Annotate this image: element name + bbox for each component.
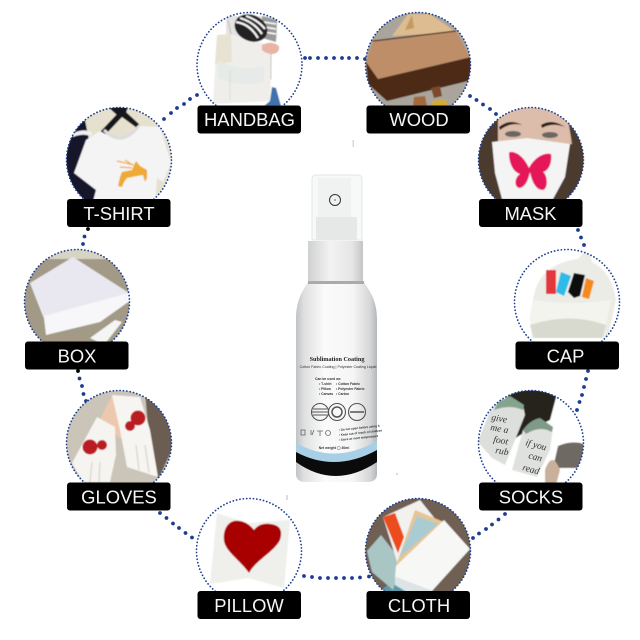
sock lettering: give [490, 413, 508, 426]
sock lettering [490, 415, 546, 474]
connector dots between circles [76, 56, 590, 580]
label: cloth: CLOTH [388, 595, 450, 616]
label: box: BOX [58, 346, 96, 366]
care notes [339, 424, 382, 442]
panel: pillow [195, 498, 303, 619]
usage list [315, 377, 365, 396]
photo: folded cloth [366, 498, 470, 591]
label: wood: WOOD [389, 109, 449, 130]
panel: gloves [66, 390, 172, 510]
specks [286, 140, 398, 500]
panel: cloth [364, 498, 472, 619]
panel: mask [478, 107, 584, 227]
label: mask: MASK [504, 203, 557, 224]
care notes: • Do not open before using it [339, 424, 380, 432]
net weight: Net weight ◯ 30ml [319, 446, 349, 450]
photo: t-shirt [66, 108, 172, 199]
label: gloves: GLOVES [81, 486, 157, 508]
label: t-shirt: T-SHIRT [83, 203, 155, 224]
usage list: • Pillow [319, 387, 331, 391]
dotted ring [478, 108, 584, 212]
photo: white box [24, 250, 130, 342]
sock lettering: if you [524, 437, 548, 453]
label: pillow: PILLOW [214, 595, 284, 616]
bottle body [296, 282, 377, 482]
dotted ring [66, 390, 172, 496]
usage list: • Cotton Fabric [336, 382, 360, 386]
panel: cap [514, 249, 620, 370]
panel: handbag [196, 9, 304, 134]
panel: box [24, 249, 131, 370]
bottle collar [308, 241, 363, 281]
panel: wood [365, 12, 473, 134]
sock lettering: foot [492, 434, 509, 448]
care notes: • Store at room temperature [339, 434, 379, 442]
bottle cap [312, 175, 362, 240]
usage list: • Canvas [319, 392, 333, 396]
label: handbag: HANDBAG [204, 109, 295, 130]
panel: socks [478, 390, 584, 510]
dotted ring [197, 12, 302, 118]
product subtitle: Cotton Fabric Coating | Polyester Coating Liquid [300, 365, 376, 369]
dotted ring [366, 12, 470, 118]
photo: socks [478, 390, 584, 482]
dotted ring [196, 498, 302, 604]
dotted ring [514, 250, 620, 354]
usage list: Can be used on: [315, 377, 341, 381]
photo: cap [530, 252, 616, 338]
dotted ring [66, 108, 172, 212]
usage list: • Carton [336, 392, 349, 396]
sock lettering: read [521, 463, 541, 477]
care icons [301, 430, 330, 436]
panel: t-shirt [66, 106, 174, 227]
certification badges [312, 404, 366, 420]
photo: pillow [210, 513, 290, 588]
photo: face mask [478, 108, 584, 199]
label: socks: SOCKS [499, 486, 563, 508]
usage list: • T-shirt [319, 382, 332, 386]
dotted ring [478, 390, 584, 496]
label wave: blue and black [296, 441, 377, 476]
photo: wood box [366, 12, 470, 106]
sock lettering: rub [494, 446, 509, 458]
care notes: • Keep out of reach of children [339, 428, 382, 437]
sock lettering: me a [489, 423, 509, 436]
dotted ring [366, 498, 470, 604]
sock lettering: can [527, 451, 543, 465]
photo: gloves [66, 390, 172, 482]
label: cap: CAP [547, 346, 584, 366]
collar ring [308, 281, 364, 284]
dotted ring [24, 250, 130, 354]
product title: Sublimation Coating [310, 356, 365, 363]
usage list: • Polyester Fabric [336, 387, 365, 391]
bottle: sublimation coating spray [296, 175, 382, 482]
photo: handbag [213, 14, 282, 106]
